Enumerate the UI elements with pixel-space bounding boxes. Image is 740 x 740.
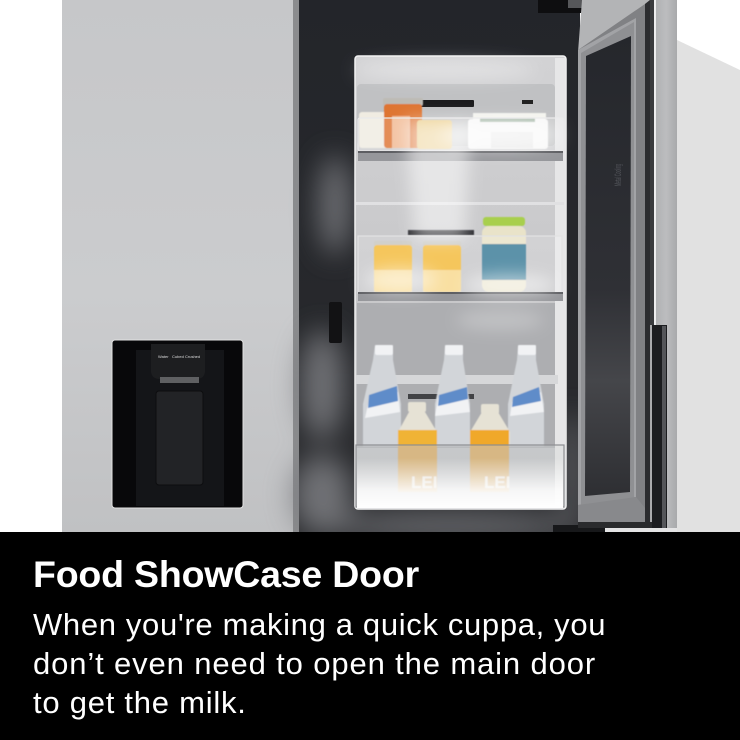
- door latch: [329, 302, 342, 343]
- dark interior door panel: [293, 0, 299, 532]
- back wall panel: [357, 84, 555, 146]
- dispenser: Water: [158, 354, 169, 359]
- bottom hinge: [553, 522, 677, 532]
- body text: When you're making a quick cuppa, you: [33, 607, 606, 642]
- refrigerator cabin: [355, 56, 566, 509]
- middle shelf bin: [358, 236, 563, 301]
- dispenser: Cubed: [172, 354, 184, 359]
- upper shelf bin: [358, 118, 564, 161]
- right stainless side strip: [650, 0, 677, 528]
- ribs: [356, 202, 564, 205]
- top hinge: [538, 0, 582, 13]
- body text: [33, 607, 606, 720]
- panel: lower shelf bottles: [363, 345, 544, 492]
- fog at base of lower shelf: [357, 458, 563, 508]
- metal cooling label: Metal Cooling: [614, 164, 624, 186]
- dispenser: Crushed: [185, 354, 200, 359]
- fog on door: [292, 155, 580, 538]
- caption panel: [0, 532, 740, 740]
- cast shadow on wall: [677, 40, 740, 532]
- steam in shelves: [355, 60, 560, 330]
- panel: upper shelf items: [359, 98, 548, 149]
- bottle labels: LEI: [411, 473, 437, 492]
- lower shelf bin: [356, 445, 564, 507]
- body text: don’t even need to open the main door: [33, 646, 596, 681]
- panel: lower shelf bottles: LEI: [484, 473, 510, 492]
- left stainless steel door: [62, 0, 293, 532]
- body text: to get the milk.: [33, 685, 247, 720]
- area above open door: [578, 0, 650, 52]
- open door outer frame: [578, 0, 650, 524]
- product photo: refrigerator with food showcase door open: [62, 0, 740, 532]
- top shelf display strip: [420, 100, 474, 107]
- panel: middle shelf items: [374, 217, 526, 292]
- heading: Food ShowCase Door: [33, 553, 419, 595]
- dispenser: [112, 340, 243, 508]
